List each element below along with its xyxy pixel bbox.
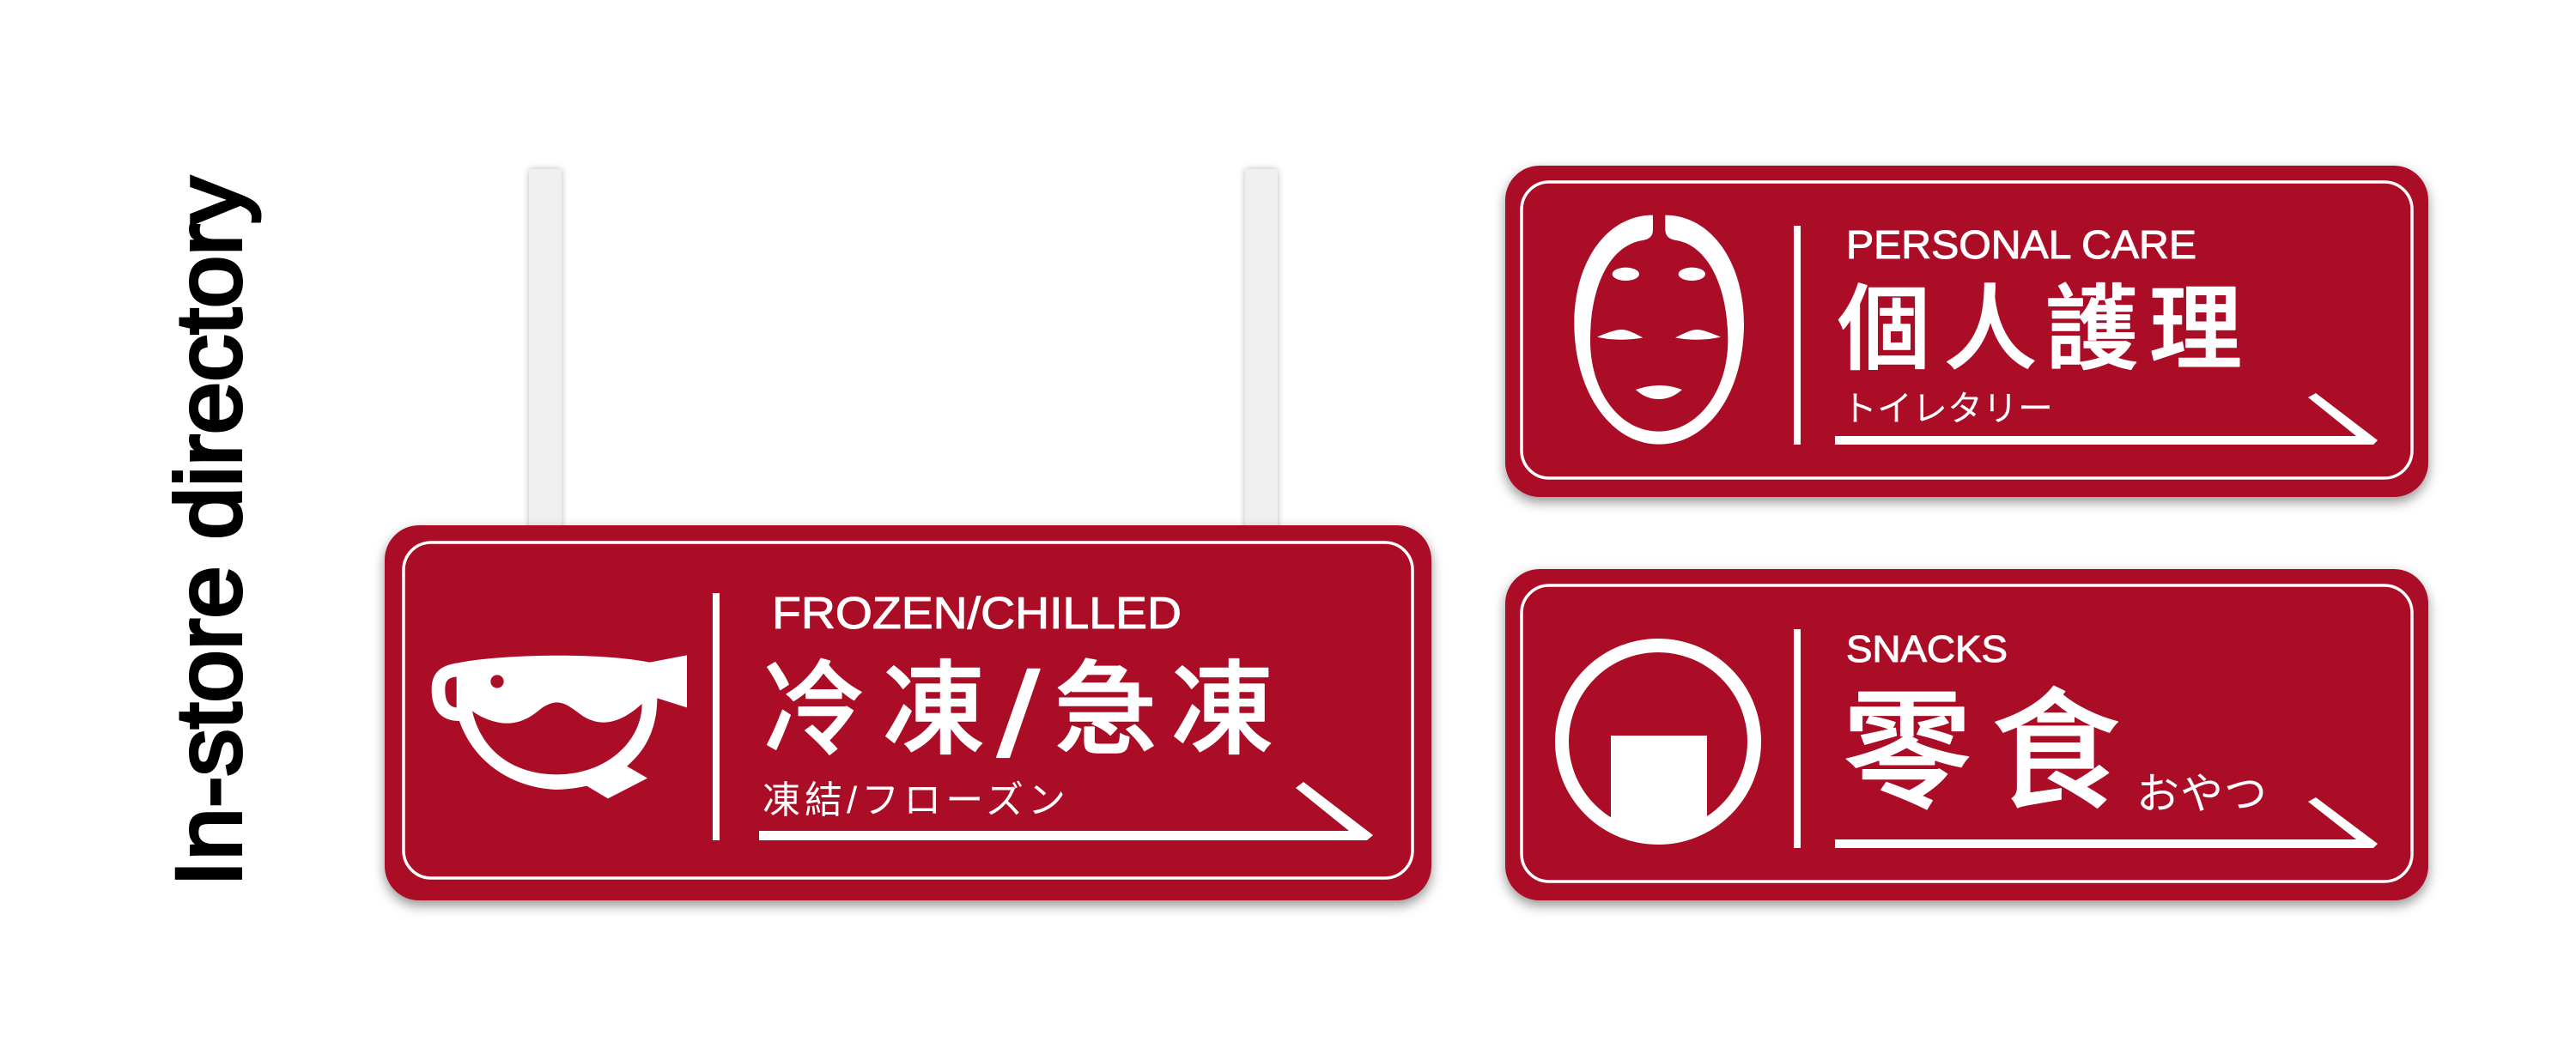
arrow: [1835, 797, 2378, 848]
panel: snacks sign: [1505, 569, 2428, 900]
japanese label: おやつ: [2136, 770, 2267, 818]
chinese heading: 零食: [1842, 680, 2121, 826]
panel: frozen/chilled sign: [385, 525, 1431, 900]
arrow: [1835, 393, 2378, 445]
icon: noh mask: [1574, 215, 1744, 445]
chinese heading: 個人護理: [1838, 277, 2242, 381]
icon: pufferfish: [432, 655, 687, 798]
japanese label: 凍結/フローズン: [762, 779, 1066, 821]
chinese heading: /: [997, 648, 1040, 782]
panel: personal care sign: [1505, 166, 2428, 497]
right hanging post: [1245, 169, 1278, 530]
japanese label: トイレタリー: [1842, 389, 2053, 428]
english heading: FROZEN/CHILLED: [772, 589, 1182, 639]
arrow: [759, 782, 1373, 840]
chinese heading: 冷凍急凍: [762, 653, 1273, 767]
icon: rice ball: [1562, 645, 1754, 838]
left hanging post: [529, 169, 562, 530]
english heading: SNACKS: [1846, 628, 2008, 670]
english heading: PERSONAL CARE: [1846, 222, 2196, 267]
title: In-store directory: [156, 177, 260, 887]
